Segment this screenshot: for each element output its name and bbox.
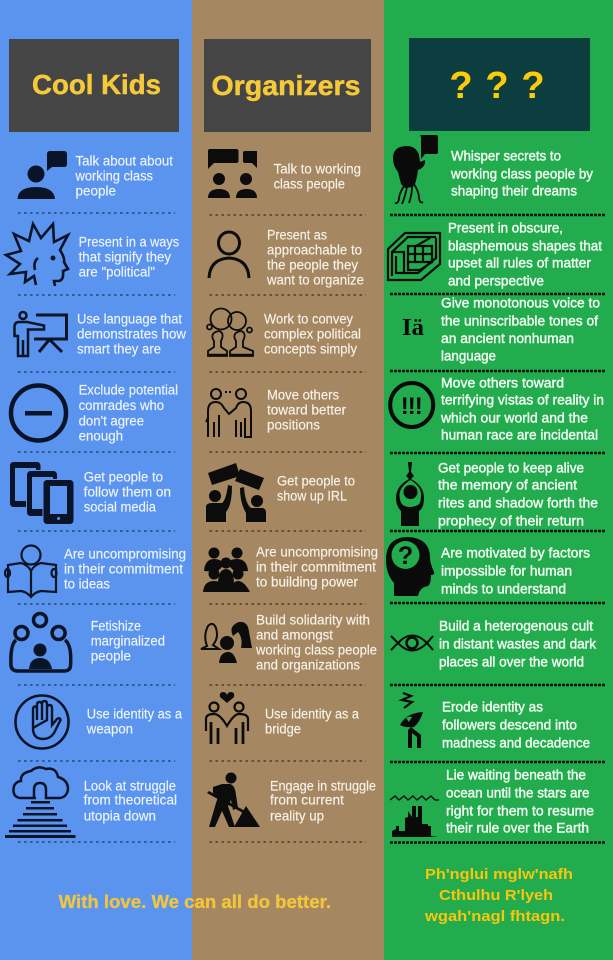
text: uncompromising power: to building power bbox=[256, 574, 358, 590]
text: show up irl bbox=[277, 474, 355, 504]
text: motivated by factors bbox=[441, 546, 590, 596]
text: uncompromising ideas bbox=[64, 546, 186, 592]
text: present approachable: approachable to bbox=[267, 242, 362, 258]
text: social media bbox=[84, 470, 171, 514]
text: look at struggle: utopia down bbox=[84, 808, 156, 824]
text: talk to: class people bbox=[274, 176, 345, 192]
text: present obscure bbox=[448, 220, 602, 288]
text: social media: social media bbox=[84, 500, 156, 514]
text: build solidarity: and amongst bbox=[256, 628, 333, 642]
text: erode identity: madness and decadence bbox=[442, 736, 590, 750]
icon: impossible cube bbox=[388, 233, 440, 280]
text: build solidarity: and organizations bbox=[256, 658, 360, 672]
panel: cool kids column bbox=[0, 0, 192, 960]
text: erode identity: Erode identity as bbox=[442, 700, 543, 714]
text: lie waiting: their rule over the Earth bbox=[446, 820, 589, 836]
text: present political: are "political" bbox=[79, 264, 155, 280]
heading: Organizers: Organizers bbox=[212, 70, 360, 101]
icon: eye glyph bbox=[391, 636, 433, 650]
icon: ia glyphs: Iä bbox=[402, 315, 424, 341]
text: terrifying vistas: which our world and the bbox=[440, 410, 588, 426]
text: talk about bbox=[75, 154, 173, 198]
text: talk about: Talk about about bbox=[76, 154, 173, 168]
text: show up irl: show up IRL bbox=[277, 488, 347, 504]
text: whisper: working class people by bbox=[450, 166, 593, 182]
text: footer sign-off: With love. We can all do better. bbox=[59, 891, 331, 912]
text: fetishize bbox=[91, 618, 165, 664]
text: use language: demonstrates how bbox=[77, 326, 186, 342]
text: work to convey: Work to convey bbox=[264, 312, 353, 326]
heading: question marks: ? bbox=[521, 65, 545, 107]
text: social media: follow them on bbox=[84, 484, 171, 500]
text: exclude: don't agree bbox=[79, 414, 144, 428]
text: present political: Present in a ways bbox=[79, 234, 179, 250]
heading: question marks: ? bbox=[449, 65, 473, 107]
icon: cloud and steps bbox=[5, 767, 76, 838]
text: work to convey bbox=[264, 312, 361, 356]
panel: organizers column bbox=[192, 0, 384, 960]
text: look at struggle bbox=[84, 778, 177, 824]
text: terrifying vistas bbox=[440, 376, 604, 442]
text: uncompromising power bbox=[256, 544, 378, 590]
icon: minus circle bbox=[11, 386, 66, 440]
text: present approachable bbox=[266, 228, 364, 288]
text: present approachable: the people they bbox=[267, 258, 358, 272]
text: fetishize: people bbox=[91, 648, 131, 664]
text: lie waiting: Lie waiting beneath the bbox=[446, 768, 586, 782]
text: use language: Use language that bbox=[77, 312, 182, 326]
text: exclude: enough bbox=[79, 428, 123, 444]
icon: decaying figure bbox=[400, 693, 423, 748]
text: ancient rites: the memory of ancient bbox=[438, 478, 577, 492]
panel: unknown cult column bbox=[384, 0, 613, 960]
heading: Cool Kids bbox=[9, 39, 179, 132]
text: identity weapon: Use identity as a bbox=[87, 706, 182, 722]
text: monotonous voice bbox=[441, 296, 600, 364]
text: talk to bbox=[274, 162, 361, 192]
heading: Organizers bbox=[204, 39, 371, 132]
icon: phones bbox=[10, 462, 74, 525]
heading: question marks: ? bbox=[485, 65, 509, 107]
icon: two bubbles and people bbox=[208, 149, 257, 198]
icon: exclamation circle: !!! bbox=[401, 393, 423, 420]
text: exclude: Exclude potential bbox=[79, 382, 178, 398]
text: build solidarity: working class people bbox=[255, 642, 377, 658]
text: motivated by factors: minds to understand bbox=[441, 582, 566, 596]
text: erode identity bbox=[442, 700, 590, 750]
text: ancient rites: prophecy of their return bbox=[438, 514, 584, 528]
text: lie waiting: ocean until the stars are bbox=[446, 786, 590, 800]
text: monotonous voice: an ancient nonhuman bbox=[441, 331, 574, 346]
text: terrifying vistas: human race are incidental bbox=[441, 428, 598, 442]
icon: speaker bbox=[18, 151, 67, 199]
text: whisper: Whisper secrets to bbox=[451, 148, 561, 164]
icon: sunken city bbox=[390, 796, 439, 837]
text: present political bbox=[79, 234, 179, 280]
text: ancient rites bbox=[438, 460, 598, 528]
text: engage in struggle bbox=[270, 778, 376, 824]
icon: diverse profiles bbox=[201, 622, 252, 663]
icon: protesters with signs bbox=[206, 463, 266, 522]
icon: two people shaking hands bbox=[206, 389, 251, 437]
text: build solidarity: Build solidarity with bbox=[256, 612, 370, 628]
text: cthulhu incantation bbox=[424, 866, 573, 925]
text: talk about: working class bbox=[75, 168, 153, 184]
text: lie waiting bbox=[446, 768, 594, 836]
text: talk about: people bbox=[76, 184, 116, 198]
text: uncompromising ideas: in their commitment bbox=[64, 562, 183, 576]
icon: hand in circle bbox=[16, 696, 68, 748]
icon: two thinkers bbox=[207, 308, 253, 356]
text: uncompromising power: in their commitment bbox=[256, 560, 376, 574]
text: present obscure: and perspective bbox=[448, 274, 544, 288]
icon: teacher at board bbox=[14, 312, 66, 356]
text: heterogenous cult: in distant wastes and dark bbox=[439, 636, 596, 652]
icon: cthulhu with bubble bbox=[393, 135, 438, 204]
text: present obscure: upset all rules of matter bbox=[448, 256, 591, 270]
text: look at struggle: from theoretical bbox=[84, 792, 177, 808]
icon: ritual figure bbox=[396, 462, 424, 526]
text: exclude bbox=[79, 382, 178, 444]
icon: crowd bbox=[203, 548, 250, 592]
text: identity bridge: bridge bbox=[265, 722, 301, 736]
text: talk to: Talk to working bbox=[274, 162, 361, 176]
text: heterogenous cult: places all over the world bbox=[439, 654, 584, 670]
text: monotonous voice: Give monotonous voice to bbox=[441, 296, 600, 310]
text: cthulhu incantation: Ph'nglui mglw'nafh bbox=[425, 866, 573, 883]
text: ancient rites: Get people to keep alive bbox=[438, 460, 584, 476]
text: use language bbox=[77, 312, 186, 356]
icon: group around person bbox=[11, 614, 71, 671]
text: motivated by factors: impossible for human bbox=[441, 564, 572, 578]
text: show up irl: Get people to bbox=[277, 474, 355, 488]
text: move others better: Move others bbox=[267, 388, 339, 402]
text: present approachable: Present as bbox=[267, 228, 327, 242]
text: motivated by factors: Are motivated by factors bbox=[441, 546, 590, 560]
text: monotonous voice: the uninscribable tones of bbox=[441, 314, 598, 328]
text: monotonous voice: language bbox=[441, 348, 496, 364]
text: present obscure: Present in obscure, bbox=[448, 220, 563, 236]
icon: worker with shovel bbox=[207, 772, 260, 827]
icon: reader with book bbox=[5, 546, 56, 597]
text: lie waiting: right for them to resume bbox=[446, 804, 594, 818]
text: present obscure: blasphemous shapes that bbox=[448, 238, 602, 254]
text: identity bridge bbox=[265, 706, 359, 736]
text: look at struggle: Look at struggle bbox=[84, 778, 176, 794]
text: fetishize: Fetishize bbox=[91, 618, 141, 634]
text: move others better: toward better bbox=[267, 402, 347, 418]
text: identity weapon: weapon bbox=[86, 722, 133, 736]
text: ancient rites: rites and shadow forth the bbox=[438, 496, 598, 510]
text: move others better bbox=[267, 388, 347, 432]
text: terrifying vistas: terrifying vistas of reality in bbox=[441, 392, 604, 408]
text: social media: Get people to bbox=[84, 470, 163, 484]
text: present approachable: want to organize bbox=[266, 272, 364, 288]
text: cthulhu incantation: Cthulhu R'lyeh bbox=[439, 887, 553, 904]
text: heterogenous cult bbox=[439, 618, 596, 670]
icon: head with question mark bbox=[386, 537, 434, 596]
text: uncompromising ideas: to ideas bbox=[64, 576, 110, 592]
text: whisper: shaping their dreams bbox=[451, 184, 577, 198]
text: engage in struggle: reality up bbox=[270, 808, 324, 824]
icon: exclamation circle bbox=[390, 383, 433, 427]
text: move others better: positions bbox=[267, 418, 320, 432]
text: work to convey: complex political bbox=[264, 326, 361, 342]
text: engage in struggle: Engage in struggle bbox=[270, 778, 376, 794]
icon: punk head bbox=[6, 224, 68, 286]
heading: question marks bbox=[409, 38, 590, 131]
text: whisper bbox=[450, 148, 593, 198]
text: engage in struggle: from current bbox=[270, 792, 344, 808]
text: terrifying vistas: Move others toward bbox=[441, 376, 564, 390]
text: cthulhu incantation: wgah'nagl fhtagn. bbox=[424, 908, 565, 925]
text: present political: that signify they bbox=[79, 250, 171, 264]
text: heterogenous cult: Build a heterogenous cult bbox=[439, 618, 593, 634]
icon: person outline bbox=[209, 232, 249, 278]
text: exclude: comrades who bbox=[79, 398, 164, 413]
icon: couple with heart bbox=[206, 692, 248, 744]
text: use language: smart they are bbox=[77, 342, 161, 356]
text: uncompromising power: Are uncompromising bbox=[256, 544, 378, 560]
text: build solidarity bbox=[255, 612, 377, 672]
text: uncompromising ideas: Are uncompromising bbox=[64, 546, 186, 562]
text: identity bridge: Use identity as a bbox=[265, 706, 359, 722]
text: fetishize: marginalized bbox=[91, 634, 165, 648]
text: work to convey: concepts simply bbox=[264, 342, 357, 356]
heading: Cool Kids: Cool Kids bbox=[32, 69, 161, 100]
text: identity weapon bbox=[86, 706, 182, 736]
text: erode identity: followers descend into bbox=[442, 718, 577, 732]
icon: head with question mark: ? bbox=[398, 542, 413, 570]
